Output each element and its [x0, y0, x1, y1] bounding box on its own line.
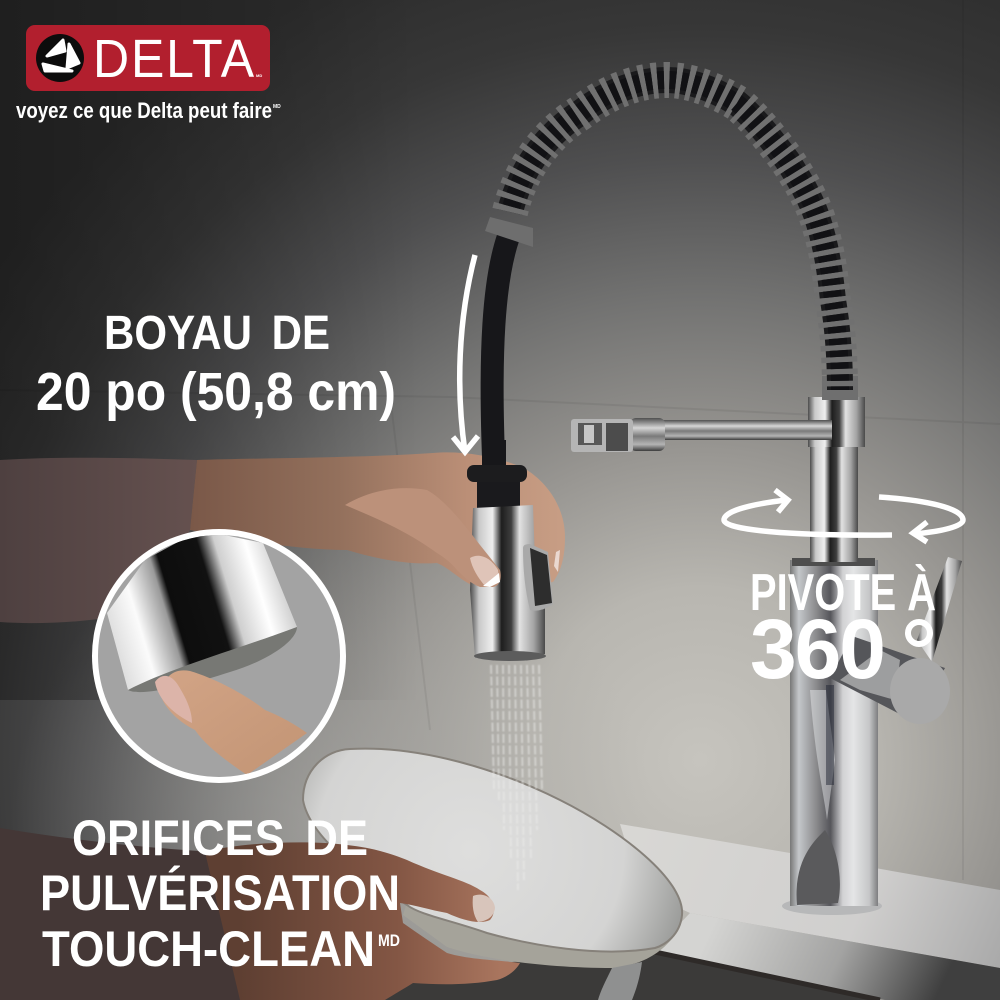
hand — [190, 452, 565, 590]
label: spray holes line 1: ORIFICES DE — [72, 810, 368, 866]
label: spray holes line 2: PULVÉRISATION — [40, 865, 400, 921]
water spray — [491, 665, 542, 890]
sweater sleeve — [0, 458, 197, 623]
logo emblem — [36, 34, 84, 82]
counter — [620, 824, 1000, 1000]
label: pivot line 1: PIVOTE À — [750, 564, 936, 622]
faucet base — [782, 558, 882, 915]
handle lever — [830, 557, 962, 724]
finger nail — [155, 676, 192, 723]
palm — [205, 842, 520, 1000]
coiled spring — [510, 80, 840, 390]
raised hand with sprayer — [0, 440, 565, 661]
thumb nail — [470, 556, 499, 586]
label: hose length line 1: BOYAU DE — [104, 307, 330, 360]
trademark superscript: MD — [378, 931, 400, 950]
inset circle: spray face detail — [92, 529, 346, 783]
plate outer rim — [403, 860, 675, 968]
tagline trademark: MD — [273, 104, 281, 110]
degree symbol — [908, 622, 930, 644]
arrow: hose length — [453, 255, 478, 452]
finger nail — [554, 550, 560, 572]
side arm holder — [571, 418, 832, 452]
fingernail — [473, 895, 495, 922]
label: pivot line 2: 360 — [750, 602, 886, 696]
logo registered mark: MD — [256, 73, 262, 78]
finger — [160, 670, 307, 775]
sink floor — [0, 950, 880, 1000]
sleeve — [0, 828, 245, 1000]
arrows: 360 rotation — [724, 490, 963, 542]
thumb — [345, 488, 501, 587]
logo: Delta — [26, 25, 270, 91]
plate held under water — [303, 749, 682, 1000]
faucet upper column — [808, 376, 865, 562]
tagline: voyez ce que Delta peut faire — [16, 98, 272, 123]
logo wordmark: DELTA — [93, 29, 256, 89]
lower hand and sleeve — [0, 828, 520, 1000]
coil connector — [485, 217, 533, 247]
faucet — [485, 80, 962, 915]
nozzle close-up — [107, 530, 297, 690]
black hose — [492, 238, 508, 470]
label: spray holes line 3: TOUCH-CLEAN — [42, 921, 375, 977]
water drip — [598, 962, 642, 1000]
nozzle spray face — [128, 627, 297, 692]
sprayer head — [467, 440, 553, 661]
label: hose length line 2: 20 po (50,8 cm) — [36, 362, 396, 422]
plate dish — [303, 749, 682, 952]
